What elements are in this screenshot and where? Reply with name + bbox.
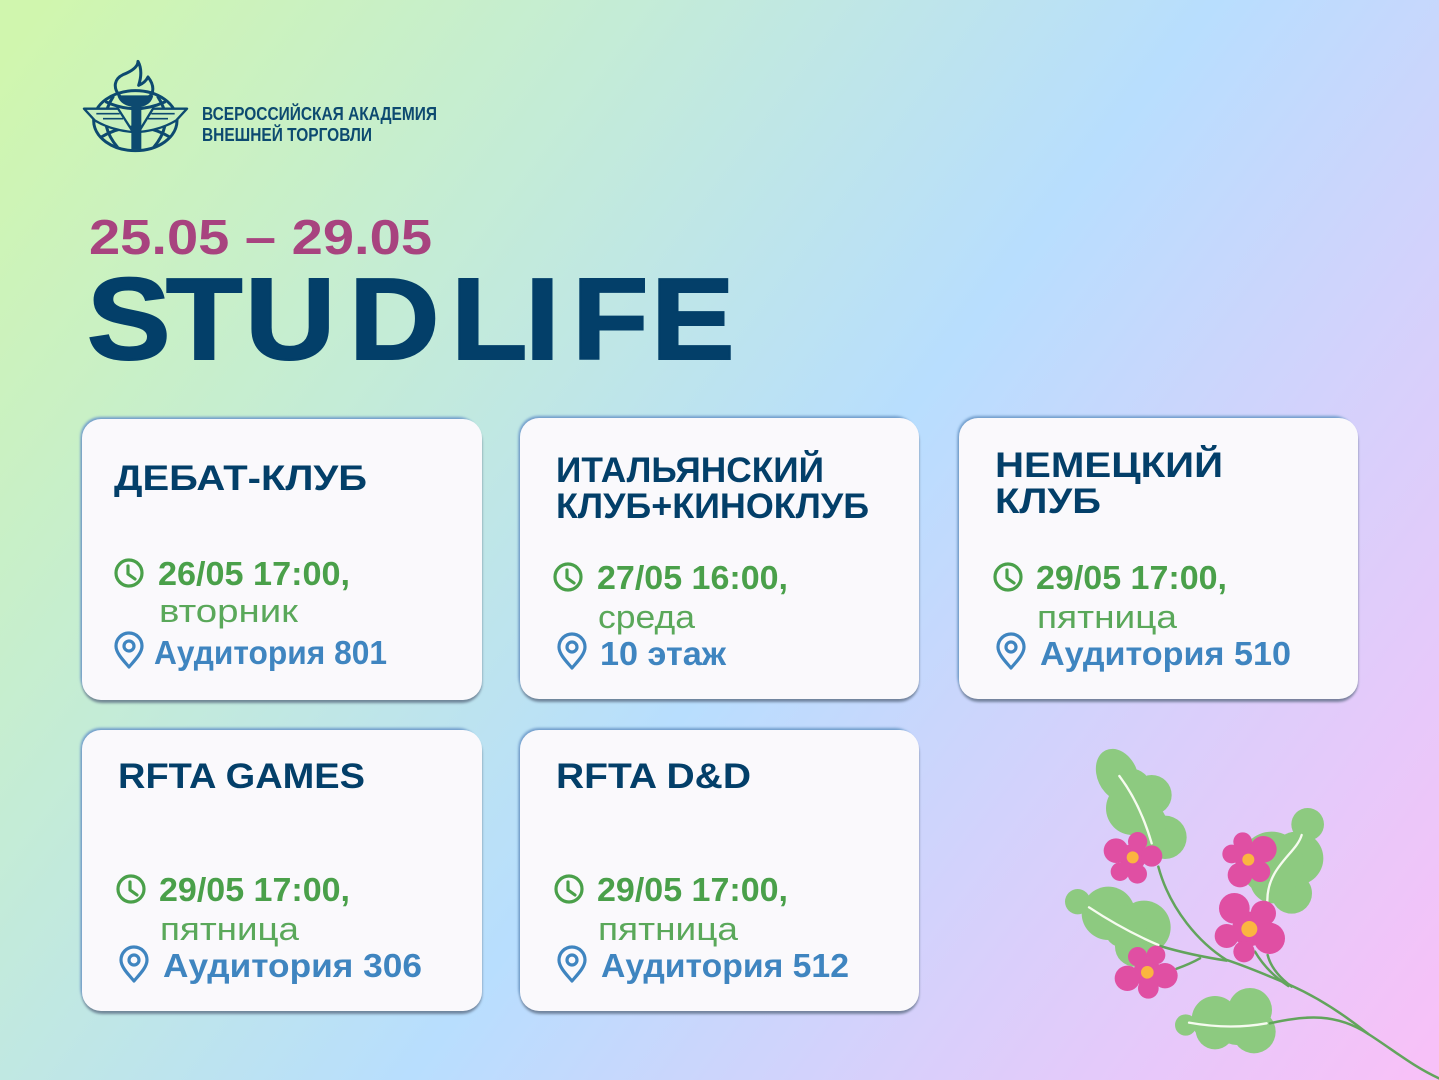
heading: RFTA D&D: [556, 757, 751, 796]
illustration: flowering branch: [1065, 742, 1439, 1078]
title: STUDLIFE: [87, 254, 735, 384]
leaves: [1065, 742, 1324, 1053]
heading: [556, 450, 869, 526]
panel: debate club: [80, 417, 482, 703]
weekday: вторник: [159, 593, 299, 629]
icon: location pin: [116, 633, 142, 667]
location: Аудитория 306: [163, 947, 422, 984]
panel: german club: [958, 416, 1358, 702]
stems: [1158, 867, 1439, 1078]
weekday: пятница: [160, 911, 299, 947]
location: Аудитория 512: [601, 947, 849, 984]
date and time: 26/05 17:00,: [158, 555, 350, 592]
location: Аудитория 801: [154, 634, 387, 671]
heading: RFTA GAMES: [118, 757, 365, 796]
icon: clock: [118, 876, 144, 902]
date and time: 29/05 17:00,: [597, 871, 788, 908]
icon: clock: [555, 564, 581, 590]
date and time: 27/05 16:00,: [597, 559, 788, 596]
heading: КЛУБ: [995, 482, 1101, 521]
weekday: пятница: [1037, 599, 1177, 635]
weekday: пятница: [598, 911, 738, 947]
panel: italian club and film club: [518, 416, 919, 702]
heading: НЕМЕЦКИЙ: [995, 445, 1223, 485]
logo text: ВСЕРОССИЙСКАЯ АКАДЕМИЯ: [202, 103, 437, 124]
location: Аудитория 510: [1040, 635, 1291, 672]
icon: clock: [995, 564, 1021, 590]
heading: ИТАЛЬЯНСКИЙ: [556, 450, 824, 490]
icon: torch and globe emblem: [84, 61, 187, 151]
heading: [995, 445, 1223, 521]
date and time: 29/05 17:00,: [1036, 559, 1227, 596]
logo: academy emblem and name: [84, 61, 437, 151]
icon: location pin: [559, 634, 585, 668]
heading: КЛУБ+КИНОКЛУБ: [556, 487, 869, 526]
panel: rfta games: [80, 728, 482, 1014]
icon: location pin: [121, 947, 147, 981]
date and time: 29/05 17:00,: [159, 871, 350, 908]
icon: location pin: [559, 947, 585, 981]
icon: clock: [116, 560, 142, 586]
leaf veins: [1089, 776, 1302, 1027]
location: 10 этаж: [600, 635, 727, 672]
heading: ДЕБАТ-КЛУБ: [114, 459, 367, 498]
logo text: ВНЕШНЕЙ ТОРГОВЛИ: [202, 124, 372, 145]
icon: location pin: [998, 634, 1024, 668]
weekday: среда: [598, 599, 695, 635]
icon: clock: [556, 876, 582, 902]
date range heading: 25.05 – 29.05: [89, 211, 432, 265]
panel: rfta d&d: [518, 728, 919, 1014]
logo text: [202, 103, 437, 145]
flowers: [1104, 832, 1285, 999]
